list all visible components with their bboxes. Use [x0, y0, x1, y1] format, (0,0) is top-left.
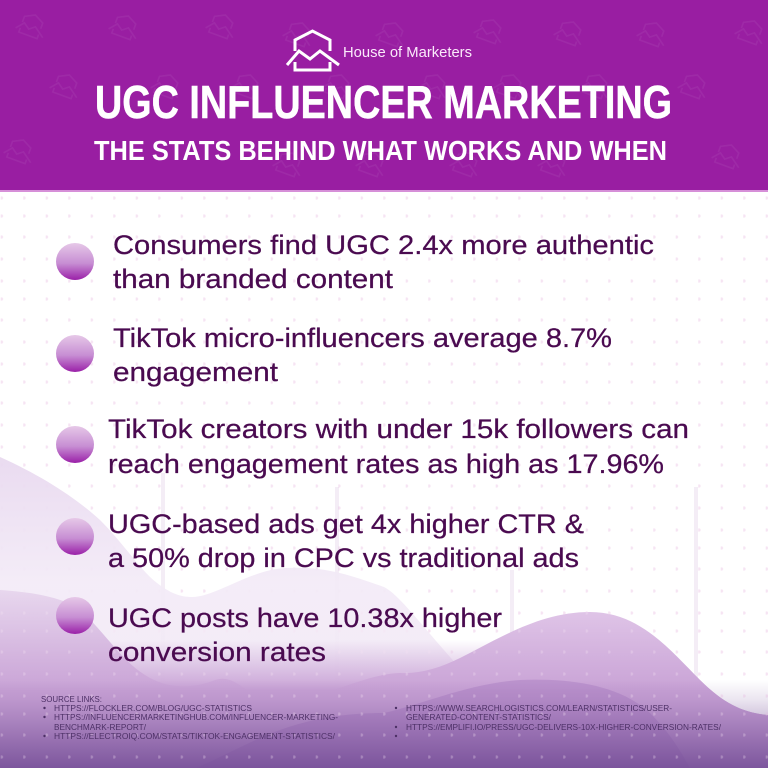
subtitle: THE STATS BEHIND WHAT WORKS AND WHEN — [94, 135, 667, 166]
bullet 3 — [56, 426, 94, 463]
stat 1 text — [113, 230, 654, 294]
source links: HTTPS://WWW.SEARCHLOGISTICS.COM/LEARN/STATISTICS/USER- — [406, 704, 672, 713]
brand name: House of Marketers — [343, 44, 472, 61]
source links: HTTPS://EMPLIFI.IO/PRESS/UGC-DELIVERS-10X-HIGHER-CONVERSION-RATES/ — [406, 723, 722, 732]
stat 1 text: than branded content — [113, 264, 394, 294]
stat 2 — [56, 323, 612, 387]
source links: HTTPS://INFLUENCERMARKETINGHUB.COM/INFLUENCER-MARKETING- — [54, 713, 338, 722]
stat 3 — [56, 414, 689, 479]
logo: House of Marketers house icon — [287, 31, 339, 70]
stat 5 text — [108, 603, 502, 667]
bullet 2 — [56, 335, 94, 372]
stat 2 text: TikTok micro-influencers average 8.7% — [113, 323, 612, 353]
decorative ghost logos — [3, 10, 768, 178]
background waves — [0, 457, 768, 768]
source links: SOURCE LINKS: — [41, 695, 102, 704]
source links: HTTPS://ELECTROIQ.COM/STATS/TIKTOK-ENGAGEMENT-STATISTICS/ — [54, 732, 336, 741]
stat 4 text: UGC-based ads get 4x higher CTR & — [108, 509, 584, 539]
stat 2 text — [113, 323, 612, 387]
stat 4 text: a 50% drop in CPC vs traditional ads — [108, 543, 579, 573]
bullet 4 — [56, 518, 94, 555]
stat 5 — [56, 597, 502, 667]
bullet 1 — [56, 243, 94, 280]
source links: HTTPS://FLOCKLER.COM/BLOG/UGC-STATISTICS — [54, 704, 252, 713]
stat 5 text: UGC posts have 10.38x higher — [108, 603, 502, 633]
stat 1 text: Consumers find UGC 2.4x more authentic — [113, 230, 654, 260]
stat 3 text: TikTok creators with under 15k followers can — [108, 414, 689, 444]
source links: GENERATED-CONTENT-STATISTICS/ — [406, 713, 552, 722]
header banner — [0, 0, 768, 192]
source links: BENCHMARK-REPORT/ — [54, 723, 147, 732]
bullet 5 — [56, 597, 94, 634]
stat 3 text: reach engagement rates as high as 17.96% — [108, 449, 664, 479]
stat 1 — [56, 230, 654, 294]
stat 2 text: engagement — [113, 357, 279, 387]
source links — [41, 695, 722, 741]
page background with dots — [0, 191, 768, 768]
stat 5 text: conversion rates — [108, 637, 326, 667]
stat 4 text — [108, 509, 584, 573]
stat 3 text — [108, 414, 689, 479]
stat 4 — [56, 509, 584, 573]
